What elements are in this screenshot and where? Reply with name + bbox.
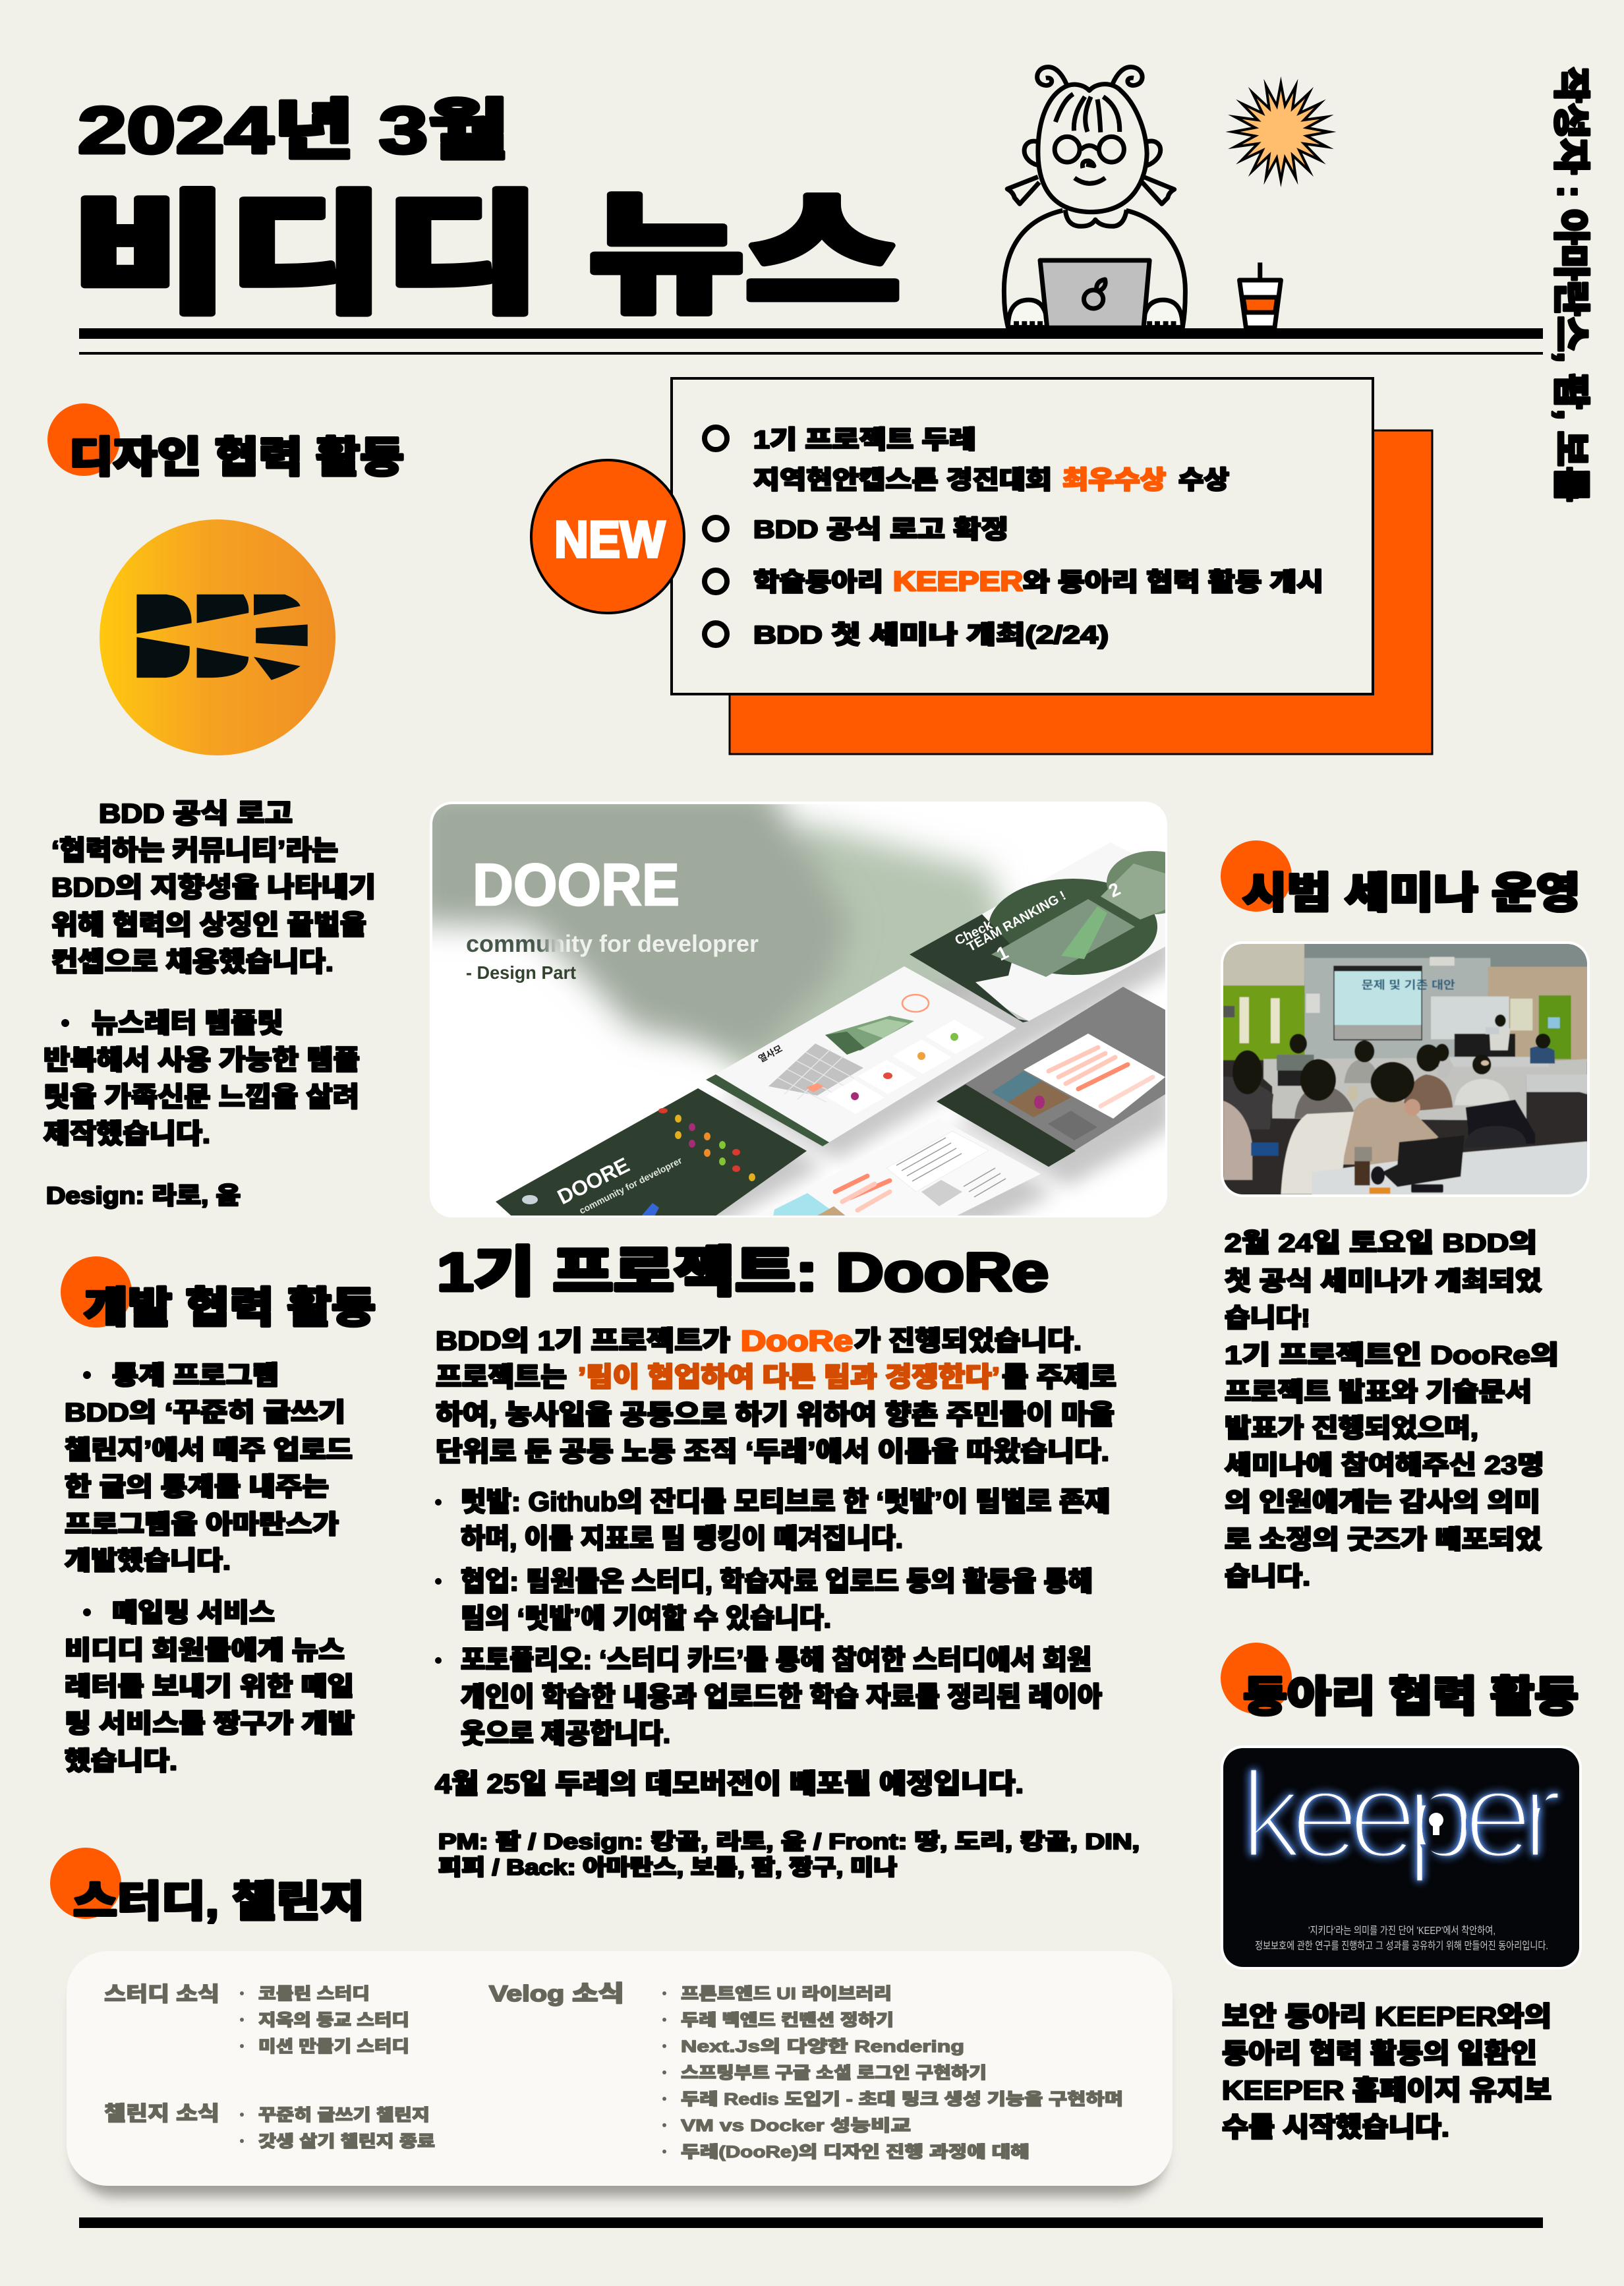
news item 3: KEEPER xyxy=(893,566,1023,597)
challenge news: 꾸준히 글쓰기 챌린지 xyxy=(258,2106,430,2125)
keeper caption: 정보보호에 관한 연구를 진행하고 그 성과를 공유하기 위해 만들어진 동아리입니다. xyxy=(1255,1940,1548,1952)
text: stats program xyxy=(65,1362,353,1575)
article intro: 단위로 둔 공동 노동 조직 ‘두레’에서 이름을 따왔습니다. xyxy=(436,1436,1109,1467)
bullet: portfolio: 포토폴리오: ‘스터디 카드’를 통해 참여한 스터디에서 회원 xyxy=(461,1645,1091,1675)
text: BDD logo description: BDD의 지향성을 나타내기 xyxy=(51,872,376,902)
badge: NEW: NEW xyxy=(554,510,665,568)
velog news: 두레 Redis 도입기 - 초대 링크 생성 기능을 구현하며 xyxy=(681,2090,1123,2109)
icon: sun burst xyxy=(1232,84,1329,180)
text: KEEPER description: 수를 시작했습니다. xyxy=(1222,2112,1449,2142)
screen: team ranking: TEAM RANKING ! xyxy=(965,889,1068,954)
screen: team ranking: 2 xyxy=(1105,879,1124,901)
text: KEEPER description: KEEPER 홈페이지 유지보 xyxy=(1222,2075,1552,2105)
text: BDD logo description xyxy=(51,798,376,977)
velog news: 스프링부트 구글 소셜 로그인 구현하기 xyxy=(681,2064,987,2082)
text: KEEPER description: 보안 동아리 KEEPER와의 xyxy=(1222,2001,1552,2032)
text: newsletter template: 뉴스레터 템플릿 xyxy=(92,1008,283,1038)
text: KEEPER description xyxy=(1222,2001,1552,2142)
article note: demo date: 4월 25일 두레의 데모버전이 배포될 예정입니다. xyxy=(435,1769,1024,1799)
byline (vertical): 작성자 : 아마란스, 팜, 보름 xyxy=(1550,67,1592,502)
article intro: 가 진행되었습니다. xyxy=(854,1326,1082,1356)
screen: main dashboard: 열사모 xyxy=(757,1043,784,1065)
article credits: PM: 팜 / Design: 캉골, 라로, 윤 / Front: 땅, 도리, 캉골, DIN, xyxy=(438,1829,1140,1854)
text: mailing service: 메일링 서비스 xyxy=(112,1599,275,1627)
section heading: study and challenge: 스터디, 챌린지 xyxy=(73,1878,364,1925)
text: stats program: 한 글의 통계를 내주는 xyxy=(65,1473,329,1502)
text: newsletter template: 제작했습니다. xyxy=(44,1119,210,1149)
keeper keyhole xyxy=(1429,1813,1443,1835)
text: seminar description: 첫 공식 세미나가 개최되었 xyxy=(1225,1268,1542,1296)
keeper caption: '지키다'라는 의미를 가진 단어 'KEEP'에서 착안하여, xyxy=(1308,1925,1495,1937)
bullet: collaboration: 팀의 ‘텃밭’에 기여할 수 있습니다. xyxy=(461,1603,831,1633)
study news xyxy=(104,1983,409,2056)
logo: BDD circle xyxy=(100,519,335,755)
section heading: study and challenge xyxy=(50,1848,364,1925)
keeper wordmark: keeper xyxy=(1240,1745,1563,1885)
article intro: 를 주제로 xyxy=(1002,1362,1116,1392)
badge: NEW xyxy=(531,460,684,613)
news item 3: 학술동아리 xyxy=(753,569,883,597)
section heading: club xyxy=(1221,1643,1579,1720)
screen: dark landing xyxy=(496,1088,807,1226)
text: seminar description: 1기 프로젝트인 DooRe의 xyxy=(1225,1341,1559,1370)
challenge news xyxy=(104,2102,435,2151)
image: seminar photo: 문제 및 기존 대안 xyxy=(1362,978,1455,991)
velog news: Next.Js의 다양한 Rendering xyxy=(681,2037,964,2056)
article credits xyxy=(438,1829,1140,1879)
text: BDD logo description: 위해 협력의 상징인 꿀벌을 xyxy=(51,910,366,940)
text: seminar description: 세미나에 참여해주신 23명 xyxy=(1225,1451,1544,1480)
screen: team ranking: Check xyxy=(953,918,995,948)
news item 1: 지역현안캡스톤 경진대회 xyxy=(753,467,1052,494)
text: mailing service: 했습니다. xyxy=(65,1747,177,1776)
bullet: garden xyxy=(435,1486,1110,1554)
text: seminar description: 프로젝트 발표와 기술문서 xyxy=(1225,1378,1532,1407)
article intro: ’팀이 협업하여 다른 팀과 경쟁한다’ xyxy=(578,1362,1000,1392)
text: mailing service xyxy=(65,1599,355,1776)
text: seminar description: 발표가 진행되었으며, xyxy=(1225,1415,1478,1443)
bullet: portfolio: 웃으로 제공합니다. xyxy=(461,1718,670,1749)
text: newsletter template xyxy=(44,1008,360,1149)
article intro: 하여, 농사일을 공동으로 하기 위하여 향촌 주민들이 마을 xyxy=(436,1399,1115,1430)
article intro: DooRe xyxy=(741,1325,853,1357)
text: newsletter template: 릿을 가족신문 느낌을 살려 xyxy=(44,1082,359,1112)
mockup subtitle: community for developrer xyxy=(466,930,759,957)
panel: study, challenge and velog news xyxy=(67,1951,1173,2196)
text: seminar description: 습니다! xyxy=(1225,1304,1310,1333)
text: mailing service: 비디디 회원들에게 뉴스 xyxy=(65,1637,345,1665)
velog news xyxy=(489,1981,1123,2161)
text: KEEPER description: 동아리 협력 활동의 일환인 xyxy=(1222,2038,1537,2068)
section heading: seminar: 시범 세미나 운영 xyxy=(1242,869,1580,917)
text: stats program: BDD의 ‘꾸준히 글쓰기 xyxy=(65,1399,345,1427)
image: seminar photo xyxy=(1213,936,1602,1200)
screen: study modal xyxy=(937,987,1165,1167)
section heading: development: 개발 협력 활동 xyxy=(84,1284,376,1332)
panel: orange backing with news list xyxy=(672,378,1432,754)
velog news: 두레 백엔드 컨벤션 정하기 xyxy=(681,2011,894,2030)
article credits: 피피 / Back: 아마란스, 보름, 팜, 짱구, 미나 xyxy=(438,1855,897,1879)
news item 1: 1기 프로젝트 두레 xyxy=(753,426,976,454)
section heading: design xyxy=(47,403,404,481)
article heading: 1기 프로젝트: DooRe xyxy=(437,1243,1049,1303)
study news: 스터디 소식 xyxy=(104,1983,219,2006)
keeper caption xyxy=(1255,1925,1548,1952)
news item 1: 최우수상 xyxy=(1062,467,1166,494)
screen: team ranking: 1 xyxy=(993,942,1012,964)
image: KEEPER logo card xyxy=(1221,1745,1582,1970)
challenge news: 갓생 살기 챌린지 종료 xyxy=(258,2132,435,2151)
mockup part label: - Design Part xyxy=(466,962,576,983)
article intro xyxy=(436,1325,1116,1467)
study news: 지옥의 등교 스터디 xyxy=(258,2011,409,2030)
bullet: collaboration xyxy=(435,1566,1093,1633)
velog news: 프론트엔드 UI 라이브러리 xyxy=(681,1985,892,2003)
velog news: 두레(DooRe)의 디자인 진행 과정에 대해 xyxy=(681,2143,1030,2161)
bullet: portfolio xyxy=(435,1645,1102,1749)
bullet: portfolio: 개인이 학습한 내용과 업로드한 학습 자료를 정리된 레이아 xyxy=(461,1682,1102,1712)
news item 1 xyxy=(705,426,1229,494)
screen: main dashboard xyxy=(706,966,1016,1146)
text: seminar description: 의 인원에게는 감사의 의미 xyxy=(1225,1488,1540,1517)
velog news: Velog 소식 xyxy=(489,1981,624,2007)
image: DooRe project mockup xyxy=(430,802,1167,1217)
screen: study list xyxy=(773,1128,1040,1216)
text: BDD logo description: ‘협력하는 커뮤니티’라는 xyxy=(51,835,338,865)
screen: dark landing: DOORE xyxy=(554,1153,633,1209)
section heading: development xyxy=(61,1256,376,1332)
mockup title: DOORE xyxy=(473,852,680,918)
screen: team ranking xyxy=(910,851,1165,1022)
bullet: garden: 텃밭: Github의 잔디를 모티브로 한 ‘텃밭’이 팀별로 존재 xyxy=(461,1486,1110,1517)
text: design credits: Design: 라로, 윤 xyxy=(46,1182,241,1209)
news item 1: 수상 xyxy=(1178,467,1229,494)
issue date: 2024년 3월 xyxy=(78,94,509,167)
article intro: 프로젝트는 xyxy=(436,1362,567,1392)
text: seminar description: 로 소정의 굿즈가 배포되었 xyxy=(1225,1526,1542,1554)
text: stats program: 프로그램을 아마란스가 xyxy=(65,1511,339,1539)
illustration: person at laptop xyxy=(1004,67,1281,328)
text: BDD logo description: 컨셉으로 채용했습니다. xyxy=(51,947,334,977)
text: mailing service: 링 서비스를 짱구가 개발 xyxy=(65,1710,355,1738)
text: stats program: 챌린지’에서 매주 업로드 xyxy=(65,1436,353,1465)
news item 3: 와 동아리 협력 활동 개시 xyxy=(1023,569,1323,597)
text: stats program: 개발했습니다. xyxy=(65,1547,231,1575)
text: mailing service: 레터를 보내기 위한 메일 xyxy=(65,1673,354,1701)
section heading: club: 동아리 협력 활동 xyxy=(1243,1673,1579,1720)
text: newsletter template: 반복해서 사용 가능한 템플 xyxy=(44,1045,360,1075)
challenge news: 챌린지 소식 xyxy=(104,2102,219,2125)
header rules xyxy=(79,328,1543,355)
screen: dark landing: community for developrer xyxy=(577,1155,684,1216)
news item 3 xyxy=(705,566,1323,597)
screen shadows xyxy=(716,947,1165,1216)
newsletter title: 비디디 뉴스 xyxy=(72,182,901,329)
text: seminar description: 습니다. xyxy=(1225,1563,1310,1591)
text: BDD logo description: BDD 공식 로고 xyxy=(99,798,293,829)
news item 4 xyxy=(705,622,1109,649)
velog news: VM vs Docker 성능비교 xyxy=(681,2117,911,2135)
study news: 미션 만들기 스터디 xyxy=(258,2037,409,2056)
text: seminar description: 2월 24일 토요일 BDD의 xyxy=(1225,1229,1537,1258)
section heading: seminar xyxy=(1221,840,1580,917)
news item 4: BDD 첫 세미나 개최(2/24) xyxy=(753,622,1109,649)
bullet: collaboration: 협업: 팀원들은 스터디, 학습자료 업로드 등의 활동을 통해 xyxy=(461,1566,1093,1597)
text: stats program: 통계 프로그램 xyxy=(112,1362,279,1390)
article bullets xyxy=(435,1486,1110,1749)
news item 2: BDD 공식 로고 확정 xyxy=(753,516,1008,544)
section heading: design: 디자인 협력 활동 xyxy=(69,434,404,481)
study news: 코틀린 스터디 xyxy=(258,1985,370,2003)
title block xyxy=(72,94,901,329)
article intro: BDD의 1기 프로젝트가 xyxy=(436,1326,730,1356)
text: seminar description xyxy=(1225,1229,1559,1591)
bullet: garden: 하며, 이를 지표로 팀 랭킹이 매겨집니다. xyxy=(461,1523,903,1554)
